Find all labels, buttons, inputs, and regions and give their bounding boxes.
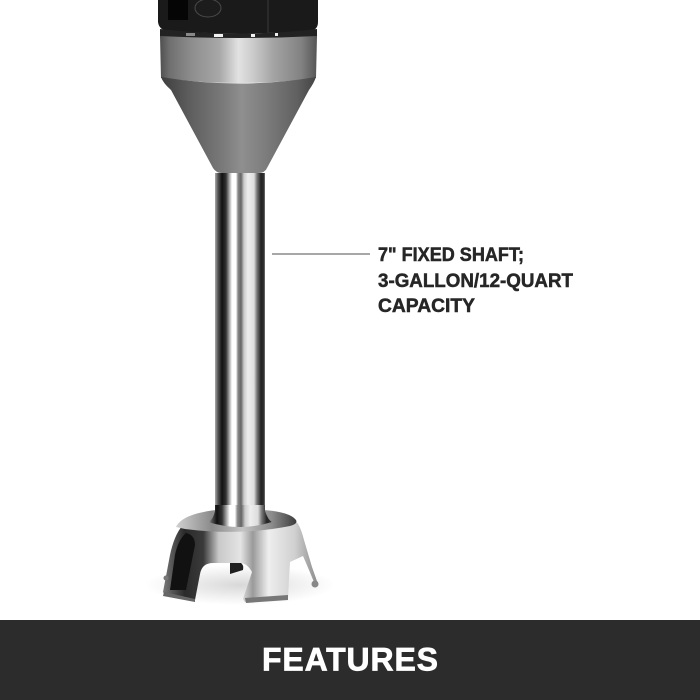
black motor housing <box>158 0 318 34</box>
dome and front legs <box>163 519 318 602</box>
footer band <box>0 620 700 700</box>
callout text <box>378 245 573 317</box>
foot rims <box>163 592 195 602</box>
product: immersion blender <box>145 0 335 605</box>
callout text: 3-GALLON/12-QUART <box>378 271 573 292</box>
callout leader line <box>272 253 370 255</box>
brushed steel collar <box>160 36 317 83</box>
steel cone <box>161 77 316 173</box>
callout text: CAPACITY <box>378 296 475 317</box>
callout text: 7" FIXED SHAFT; <box>378 245 524 266</box>
blade guard <box>163 505 318 603</box>
footer heading: FEATURES <box>262 642 438 678</box>
floor shadow <box>145 565 335 605</box>
polished shaft <box>215 173 265 513</box>
vented ring <box>160 29 317 38</box>
left dark face <box>170 533 195 590</box>
polished neck <box>208 505 272 527</box>
flange <box>176 510 296 532</box>
inner dark wedge under arch <box>230 563 243 574</box>
